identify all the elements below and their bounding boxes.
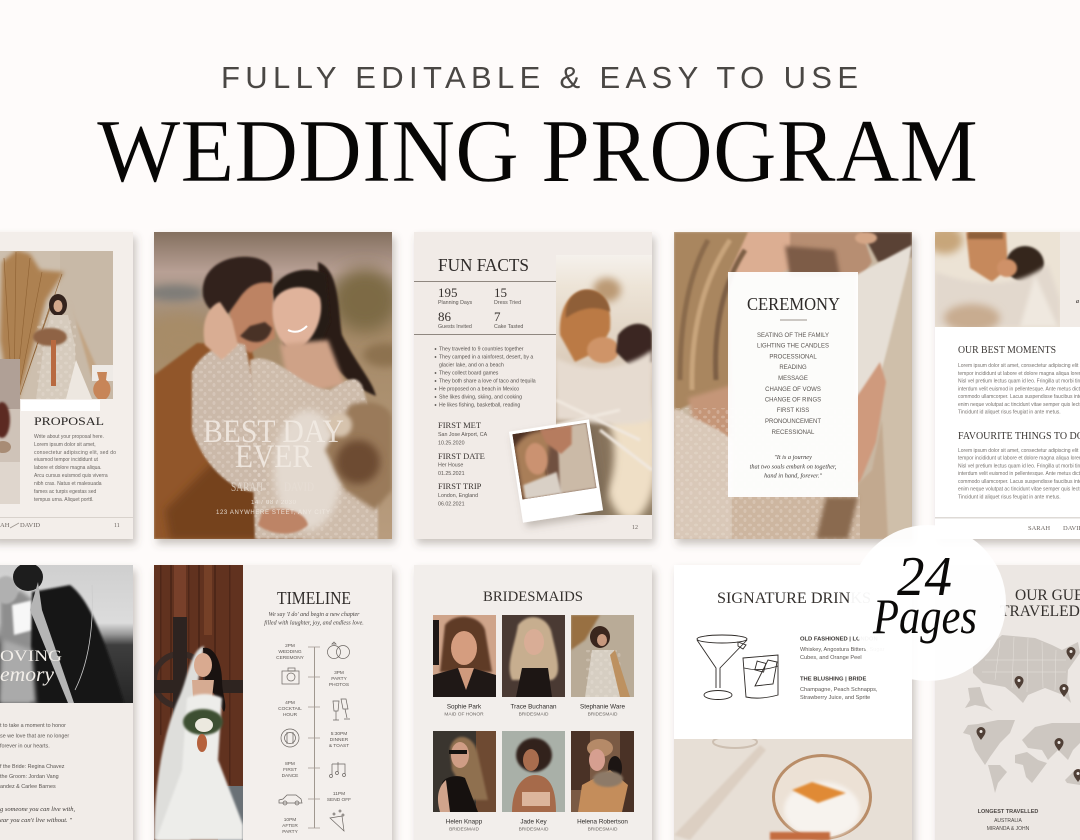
text: first met, date, trip: Her House <box>438 462 463 468</box>
heading: bridesmaids: BRIDESMAIDS <box>483 589 583 605</box>
photo: couple in desert <box>154 232 392 539</box>
panel: guest map page <box>935 565 1080 840</box>
text: the blushing bride: Champagne, Peach Schnapps, <box>800 687 878 693</box>
photo: stephanie <box>571 615 634 697</box>
text: the blushing bride: THE BLUSHING | BRIDE <box>800 676 866 682</box>
text: first met, date, trip: 01.25.2021 <box>438 471 465 477</box>
timeline labels <box>276 643 351 835</box>
text: date and address <box>216 500 330 516</box>
icon: car <box>279 795 302 805</box>
text: order of service <box>757 333 829 436</box>
icon: champagne glasses <box>333 699 350 720</box>
photo: jade <box>502 731 565 812</box>
text: proposal body <box>34 434 116 503</box>
text: honoring family <box>0 723 69 790</box>
text: honoring family: se we love that are no longer <box>0 734 69 740</box>
text: proposal body: tempus urna. Aliquet porttl. <box>34 497 93 503</box>
text: proposal body: eiusmod tempor incididunt ut <box>34 457 99 463</box>
footer: couple names <box>1028 525 1080 532</box>
panel: proposal page <box>0 232 133 539</box>
text: timeline intro: We say 'I do' and begin a new chapter <box>268 612 360 618</box>
timeline labels: 11PM <box>333 791 345 797</box>
timeline labels: PHOTOS <box>329 682 349 688</box>
photo: inset detail <box>0 359 20 504</box>
text: fun facts list: They both share a love of taco and tequila <box>439 378 536 384</box>
stats: numbers: Cake Tasted <box>494 324 523 330</box>
text: order of service: CHANGE OF VOWS <box>765 387 821 393</box>
stats: numbers: 15 <box>494 285 507 300</box>
text: moments paragraph: tempor incididunt ut labore et dolore magna aliqua lorem <box>958 371 1080 377</box>
text: old fashioned: Cubes, and Orange Peel <box>800 655 862 661</box>
text: couple names <box>231 479 314 494</box>
subtitle: FULLY EDITABLE & EASY TO USE <box>221 60 858 95</box>
text: proposal body: fames ac turpis egestas sed <box>34 489 96 495</box>
text: the blushing bride: Strawberry Juice, and Sprite <box>800 695 870 701</box>
text: bridesmaid names row one: MAID OF HONOR <box>444 712 484 718</box>
badge: 24 pages <box>850 525 1006 681</box>
icon: music notes <box>330 762 346 778</box>
panel: bridesmaids page <box>414 565 652 840</box>
photo: veil kiss <box>556 270 652 515</box>
text: order of service: PRONOUNCEMENT <box>765 419 821 425</box>
text: order of service: LIGHTING THE CANDLES <box>757 344 829 350</box>
text: first met, date, trip: San Jose Airport, CA <box>438 432 488 438</box>
text: bridesmaid names row two: Jade Key <box>520 818 547 826</box>
text: fun facts list: They traveled to 9 countries together <box>439 346 524 352</box>
icon: wedding rings <box>328 642 350 658</box>
text: bridesmaid names row two: BRIDESMAID <box>588 826 618 832</box>
badge: 24 pages: Pages <box>872 588 977 644</box>
stats: numbers: 86 <box>438 309 452 324</box>
text: first met, date, trip: 06.02.2021 <box>438 502 465 508</box>
photo: trace <box>502 615 565 697</box>
text: order of service: CHANGE OF RINGS <box>765 398 821 404</box>
text: fun facts list: He likes fishing, basketball, reading <box>439 402 520 408</box>
text: honoring family: andez & Carlee Barnes <box>0 784 56 790</box>
text: proposal body: Lorem ipsum dolor sit amet, <box>34 442 96 448</box>
text: longest travelled: AUSTRALIA <box>994 818 1023 824</box>
timeline labels: FIRST <box>283 767 297 773</box>
heading: in loving memory: OVING <box>0 648 63 665</box>
footer: couple names: AH <box>0 522 10 529</box>
text: fun facts list: She likes diving, skiing, and cooking <box>439 394 522 400</box>
stats: numbers: Dress Tried <box>494 300 521 306</box>
timeline labels: 3PM <box>334 670 344 676</box>
timeline labels: 5:30PM <box>331 731 347 737</box>
timeline labels: SEND OFF <box>327 797 351 803</box>
text: first met, date, trip: FIRST MET <box>438 420 482 430</box>
text: old fashioned: Whiskey, Angostura Bitters, Sugar <box>800 647 885 653</box>
title: WEDDING PROGRAM <box>97 102 978 201</box>
stats: numbers: 7 <box>494 309 501 324</box>
timeline labels: DANCE <box>282 773 298 779</box>
footer: couple names: SARAH <box>1028 525 1050 532</box>
text: order of service: READING <box>779 365 807 371</box>
icon: confetti popper <box>330 810 344 831</box>
text: longest travelled <box>978 809 1038 832</box>
text: old fashioned <box>800 636 885 661</box>
text: bridesmaid names row two: BRIDESMAID <box>449 826 479 832</box>
panel: signature drinks page <box>674 565 912 840</box>
polaroid photo <box>509 419 603 523</box>
photo: helen <box>433 731 496 812</box>
text: bridesmaid names row two: Helena Robertson <box>577 818 628 826</box>
text: bridesmaid names row one <box>444 704 625 718</box>
text: date and address: 14 / 08 / 2030 <box>251 500 297 506</box>
text: bridesmaid names row one: BRIDESMAID <box>588 712 618 718</box>
panel: ceremony page <box>674 232 912 539</box>
map: world <box>963 720 1080 793</box>
text: memorial quote: g someone you can live with, <box>0 806 75 813</box>
heading: our guests traveled <box>1000 587 1080 620</box>
heading: ceremony: CEREMONY <box>747 294 840 314</box>
heading: best day ever: BEST DAY <box>203 414 344 450</box>
text: longest travelled: LONGEST TRAVELLED <box>978 809 1038 815</box>
text: quote: "It is a journey <box>774 454 812 461</box>
timeline labels: 4PM <box>285 700 295 706</box>
text: honoring family: forever in our hearts. <box>0 744 50 750</box>
heading: timeline: TIMELINE <box>277 588 351 608</box>
icon: camera <box>282 668 299 684</box>
text: quote <box>750 454 837 480</box>
heading: best day ever <box>203 414 344 475</box>
text: order of service: PROCESSIONAL <box>769 354 817 360</box>
text: order of service: RECESSIONAL <box>772 430 815 436</box>
photo: bride at chapel door <box>154 565 243 840</box>
timeline labels: HOUR <box>283 712 298 718</box>
panel: proposal page: DAVID <box>20 522 40 529</box>
stats: numbers: 195 <box>438 285 458 300</box>
text: old fashioned: OLD FASHIONED | LONDON <box>800 636 878 642</box>
timeline labels: 2PM <box>285 643 295 649</box>
text: memorial quote <box>0 806 75 824</box>
panel: best moments page <box>927 226 1080 539</box>
text: order of service: MESSAGE <box>778 376 808 382</box>
text: first met, date, trip <box>438 420 488 508</box>
heading: signature drinks: SIGNATURE DRINKS <box>717 590 871 607</box>
panel: fun facts page <box>414 232 658 539</box>
stats: numbers <box>438 285 523 330</box>
timeline labels: CEREMONY <box>276 655 305 661</box>
heading: proposal: PROPOSAL <box>34 414 104 428</box>
map pins <box>976 647 1080 782</box>
stats: numbers: Planning Days <box>438 300 473 306</box>
text: fun facts list <box>435 346 536 408</box>
panel: cover page best day ever <box>147 232 407 539</box>
text: quote: hand in hand, forever." <box>764 472 822 480</box>
white caption bar <box>21 400 100 411</box>
text: favourite things paragraph <box>958 448 1080 500</box>
text: bridesmaid names row one: Sophie Park <box>447 704 482 710</box>
timeline labels: WEDDING <box>278 649 302 655</box>
text: couple names: DAVID <box>284 479 314 494</box>
text: proposal body: nibh cras. Natus et malesuada <box>34 481 102 487</box>
photo: forehead kiss <box>674 232 912 539</box>
heading: in loving memory <box>0 648 63 686</box>
text: honoring family: f the Bride: Regina Chavez <box>0 764 65 770</box>
text: timeline intro: filled with laughter, joy, and endless love. <box>264 620 364 626</box>
text: first met, date, trip: 10.25.2020 <box>438 440 465 446</box>
text: the blushing bride <box>800 676 878 701</box>
icon: martini and rocks glass <box>697 635 778 700</box>
text: bridesmaid names row two <box>446 818 628 832</box>
photo: black and white couple <box>0 565 133 703</box>
text: favourite things paragraph: Tincidunt id aliquet risus feugiat in ante metus. <box>958 494 1061 500</box>
ceremony card <box>728 272 858 497</box>
timeline labels: 8PM <box>285 761 295 767</box>
text: favourite things paragraph: tempor incididunt ut labore et dolore magna aliqua lorem <box>958 456 1080 462</box>
timeline labels: AFTER <box>282 823 298 829</box>
photo: veil kiss wide <box>935 232 1060 327</box>
text: bridesmaid names row one: Stephanie Ware <box>580 704 625 710</box>
timeline labels: 10PM <box>284 817 296 823</box>
text: cropped side note: a <box>1076 299 1079 305</box>
text: first met, date, trip: FIRST TRIP <box>438 481 482 491</box>
heading: in loving memory: emory <box>0 664 54 686</box>
timeline labels: PARTY <box>282 829 299 835</box>
panel: timeline page <box>154 565 392 840</box>
text: honoring family: t to take a moment to honor <box>0 723 66 729</box>
text: proposal body: labore et dolore magna aliqua. <box>34 465 102 471</box>
timeline labels: PARTY <box>331 676 348 682</box>
text: moments paragraph: Tincidunt id aliquet risus feugiat in ante metus. <box>958 410 1061 416</box>
text: first met, date, trip: London, England <box>438 493 478 499</box>
panel: in loving memory page <box>0 563 133 840</box>
timeline labels: DINNER <box>330 737 349 743</box>
badge: 24 pages: 24 <box>897 546 952 608</box>
text: order of service: FIRST KISS <box>777 408 809 414</box>
text: proposal body: consectetur adipiscing elit, sed do <box>34 450 116 456</box>
text: proposal body: Arcu cursus euismod quis viverra <box>34 473 108 479</box>
photo: helena <box>571 731 634 812</box>
text: honoring family: the Groom: Jordan Vang <box>0 774 59 780</box>
timeline labels: COCKTAIL <box>278 706 302 712</box>
text: date and address: 123 ANYWHERE STEET, ANY CITY <box>216 510 330 516</box>
text: fun facts list: They collect board games <box>439 370 499 376</box>
text: quote: that two souls embark on together, <box>750 464 837 470</box>
text: fun facts list: glacier lake, and on a beach <box>439 362 504 368</box>
text: bridesmaid names row two: Helen Knapp <box>446 818 483 826</box>
text: fun facts list: They camped in a rainforest, desert, by a <box>439 354 533 360</box>
text: proposal body: Write about your proposal here. <box>34 434 104 440</box>
heading: our best moments: OUR BEST MOMENTS <box>958 345 1056 356</box>
timeline axis <box>308 647 320 828</box>
text: first met, date, trip: FIRST DATE <box>438 451 485 461</box>
text: longest travelled: MIRANDA & JOHN <box>987 826 1030 832</box>
text: bridesmaid names row two: BRIDESMAID <box>519 826 549 832</box>
text: timeline intro <box>264 612 364 626</box>
page number: 11 <box>114 523 120 529</box>
heading: fun facts: FUN FACTS <box>438 255 529 275</box>
photo: cocktail <box>674 739 912 840</box>
text: couple names: SARAH <box>231 479 263 494</box>
text: moments paragraph <box>958 363 1080 416</box>
icon: dinner plate <box>281 729 299 747</box>
page number: 12 <box>632 525 638 531</box>
timeline labels: & TOAST <box>329 743 349 749</box>
photo: bride with pampas <box>0 251 113 399</box>
text: fun facts list: He proposed on a beach in Mexico <box>439 386 519 392</box>
text: bridesmaid names row one: Trace Buchanan <box>511 704 557 710</box>
map: united states <box>965 635 1080 711</box>
photo: sophie <box>433 615 496 697</box>
stats: numbers: Guests Invited <box>438 324 472 330</box>
heading: best day ever: EVER <box>235 439 312 475</box>
text: bridesmaid names row one: BRIDESMAID <box>519 712 549 718</box>
text: memorial quote: ear you can't live without. " <box>0 817 72 824</box>
text: order of service: SEATING OF THE FAMILY <box>757 333 829 339</box>
